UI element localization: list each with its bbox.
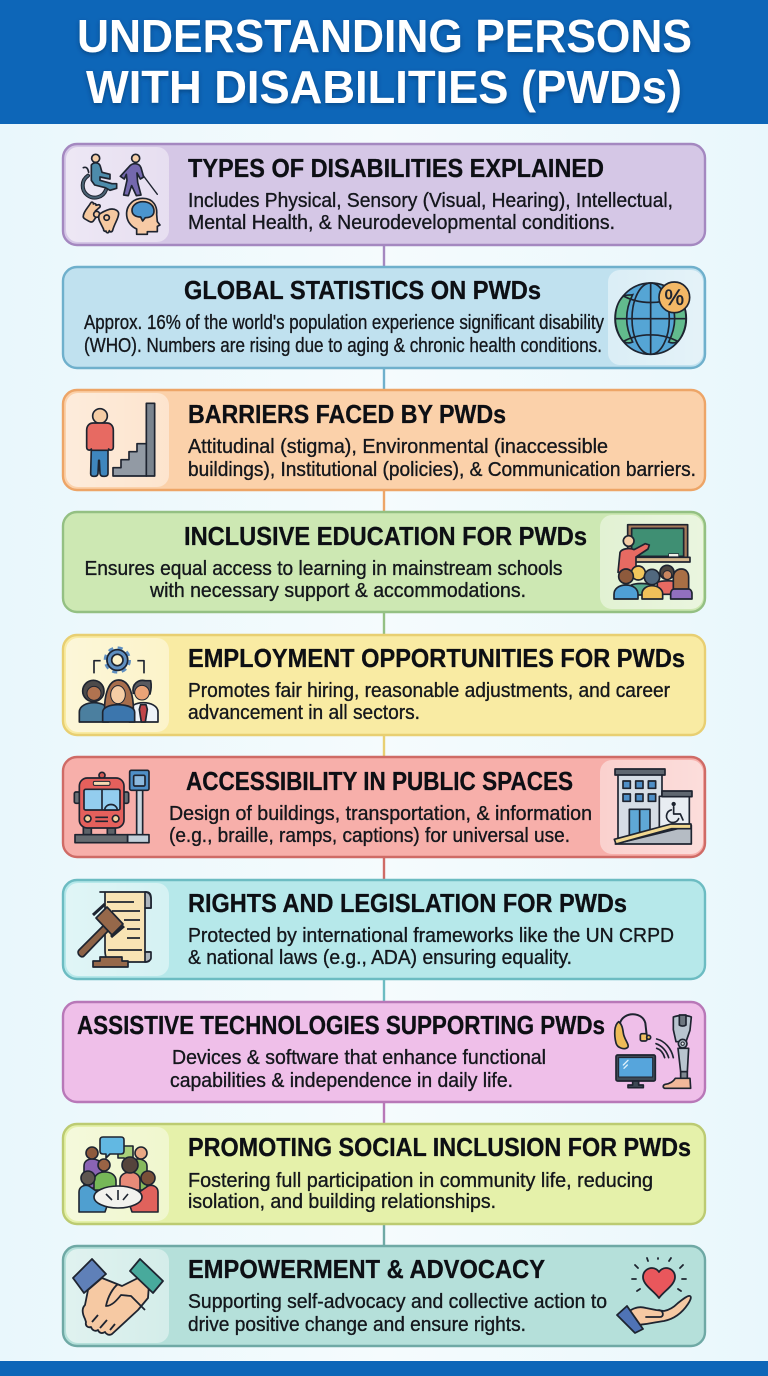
description: Ensures equal access to learning in mainstream schools [84,557,562,580]
description: buildings), Institutional (policies), & Communication barriers. [188,458,696,481]
heading: EMPOWERMENT & ADVOCACY [188,1254,545,1284]
description [188,189,673,234]
title: UNDERSTANDING PERSONS [77,10,692,62]
title [77,10,692,113]
icon: gavel and scroll [78,892,151,967]
icon: handshake [73,1259,163,1335]
description: (e.g., braille, ramps, captions) for universal use. [169,824,570,847]
description: Supporting self-advocacy and collective action to [188,1290,607,1313]
description: drive positive change and ensure rights. [188,1313,526,1336]
description: & national laws (e.g., ADA) ensuring equality. [188,946,572,969]
description [170,1046,546,1092]
description: Promotes fair hiring, reasonable adjustments, and career [188,679,670,702]
panel: social inclusion [63,1124,705,1224]
description [84,311,605,357]
description: Fostering full participation in community life, reducing [188,1169,653,1192]
footer band [0,1361,768,1376]
heading: ASSISTIVE TECHNOLOGIES SUPPORTING PWDs [77,1010,605,1040]
heading: EMPLOYMENT OPPORTUNITIES FOR PWDs [188,643,685,673]
panel: inclusive education [63,512,705,612]
panel: rights and legislation [63,880,705,979]
description: Attitudinal (stigma), Environmental (inaccessible [188,435,608,458]
description [84,557,562,602]
heading: TYPES OF DISABILITIES EXPLAINED [188,153,604,183]
description: (WHO). Numbers are rising due to aging & chronic health conditions. [84,334,602,357]
icon: hearing aid, monitor, prosthetic leg [615,1014,691,1088]
icon: bus stop [74,770,149,843]
description: isolation, and building relationships. [188,1190,496,1213]
description [188,435,696,481]
icon: accessible building [614,769,692,844]
description: Design of buildings, transportation, & information [169,802,592,825]
heading: RIGHTS AND LEGISLATION FOR PWDs [188,888,627,918]
icon: community group [79,1137,158,1212]
description [188,1290,607,1336]
icon: person facing stairs [87,403,155,476]
description: Mental Health, & Neurodevelopmental conditions. [188,211,615,234]
panel: global statistics [63,267,705,368]
description [188,679,670,724]
header band [0,0,768,124]
panel: types of disabilities [63,144,705,245]
description: Devices & software that enhance functional [172,1046,546,1069]
panel: empowerment and advocacy [63,1246,705,1346]
description: Approx. 16% of the world's population experience significant disability [84,311,605,334]
panel: assistive technologies [63,1002,705,1102]
panel: accessibility [63,757,705,857]
description: with necessary support & accommodations. [149,579,526,602]
icon: globe with percent: % [665,285,684,310]
description [169,802,592,847]
panel: barriers [63,390,705,490]
heading: INCLUSIVE EDUCATION FOR PWDs [184,521,587,551]
description: Includes Physical, Sensory (Visual, Hearing), Intellectual, [188,189,673,212]
heading: ACCESSIBILITY IN PUBLIC SPACES [186,766,573,796]
icon: disability types [83,154,160,234]
description [188,924,674,969]
description: advancement in all sectors. [188,701,420,724]
icon: heart in open hand [617,1258,691,1333]
heading: PROMOTING SOCIAL INCLUSION FOR PWDs [188,1132,691,1162]
description: Protected by international frameworks like the UN CRPD [188,924,674,947]
icon: globe with percent [615,282,690,354]
title: WITH DISABILITIES (PWDs) [86,61,682,113]
connector line [383,245,385,1245]
icon: team with gear [79,649,158,722]
heading: GLOBAL STATISTICS ON PWDs [184,275,541,305]
panel: employment [63,635,705,735]
heading: BARRIERS FACED BY PWDs [188,399,506,429]
icon: classroom [614,525,692,599]
description: capabilities & independence in daily life. [170,1069,513,1092]
description [188,1169,653,1213]
